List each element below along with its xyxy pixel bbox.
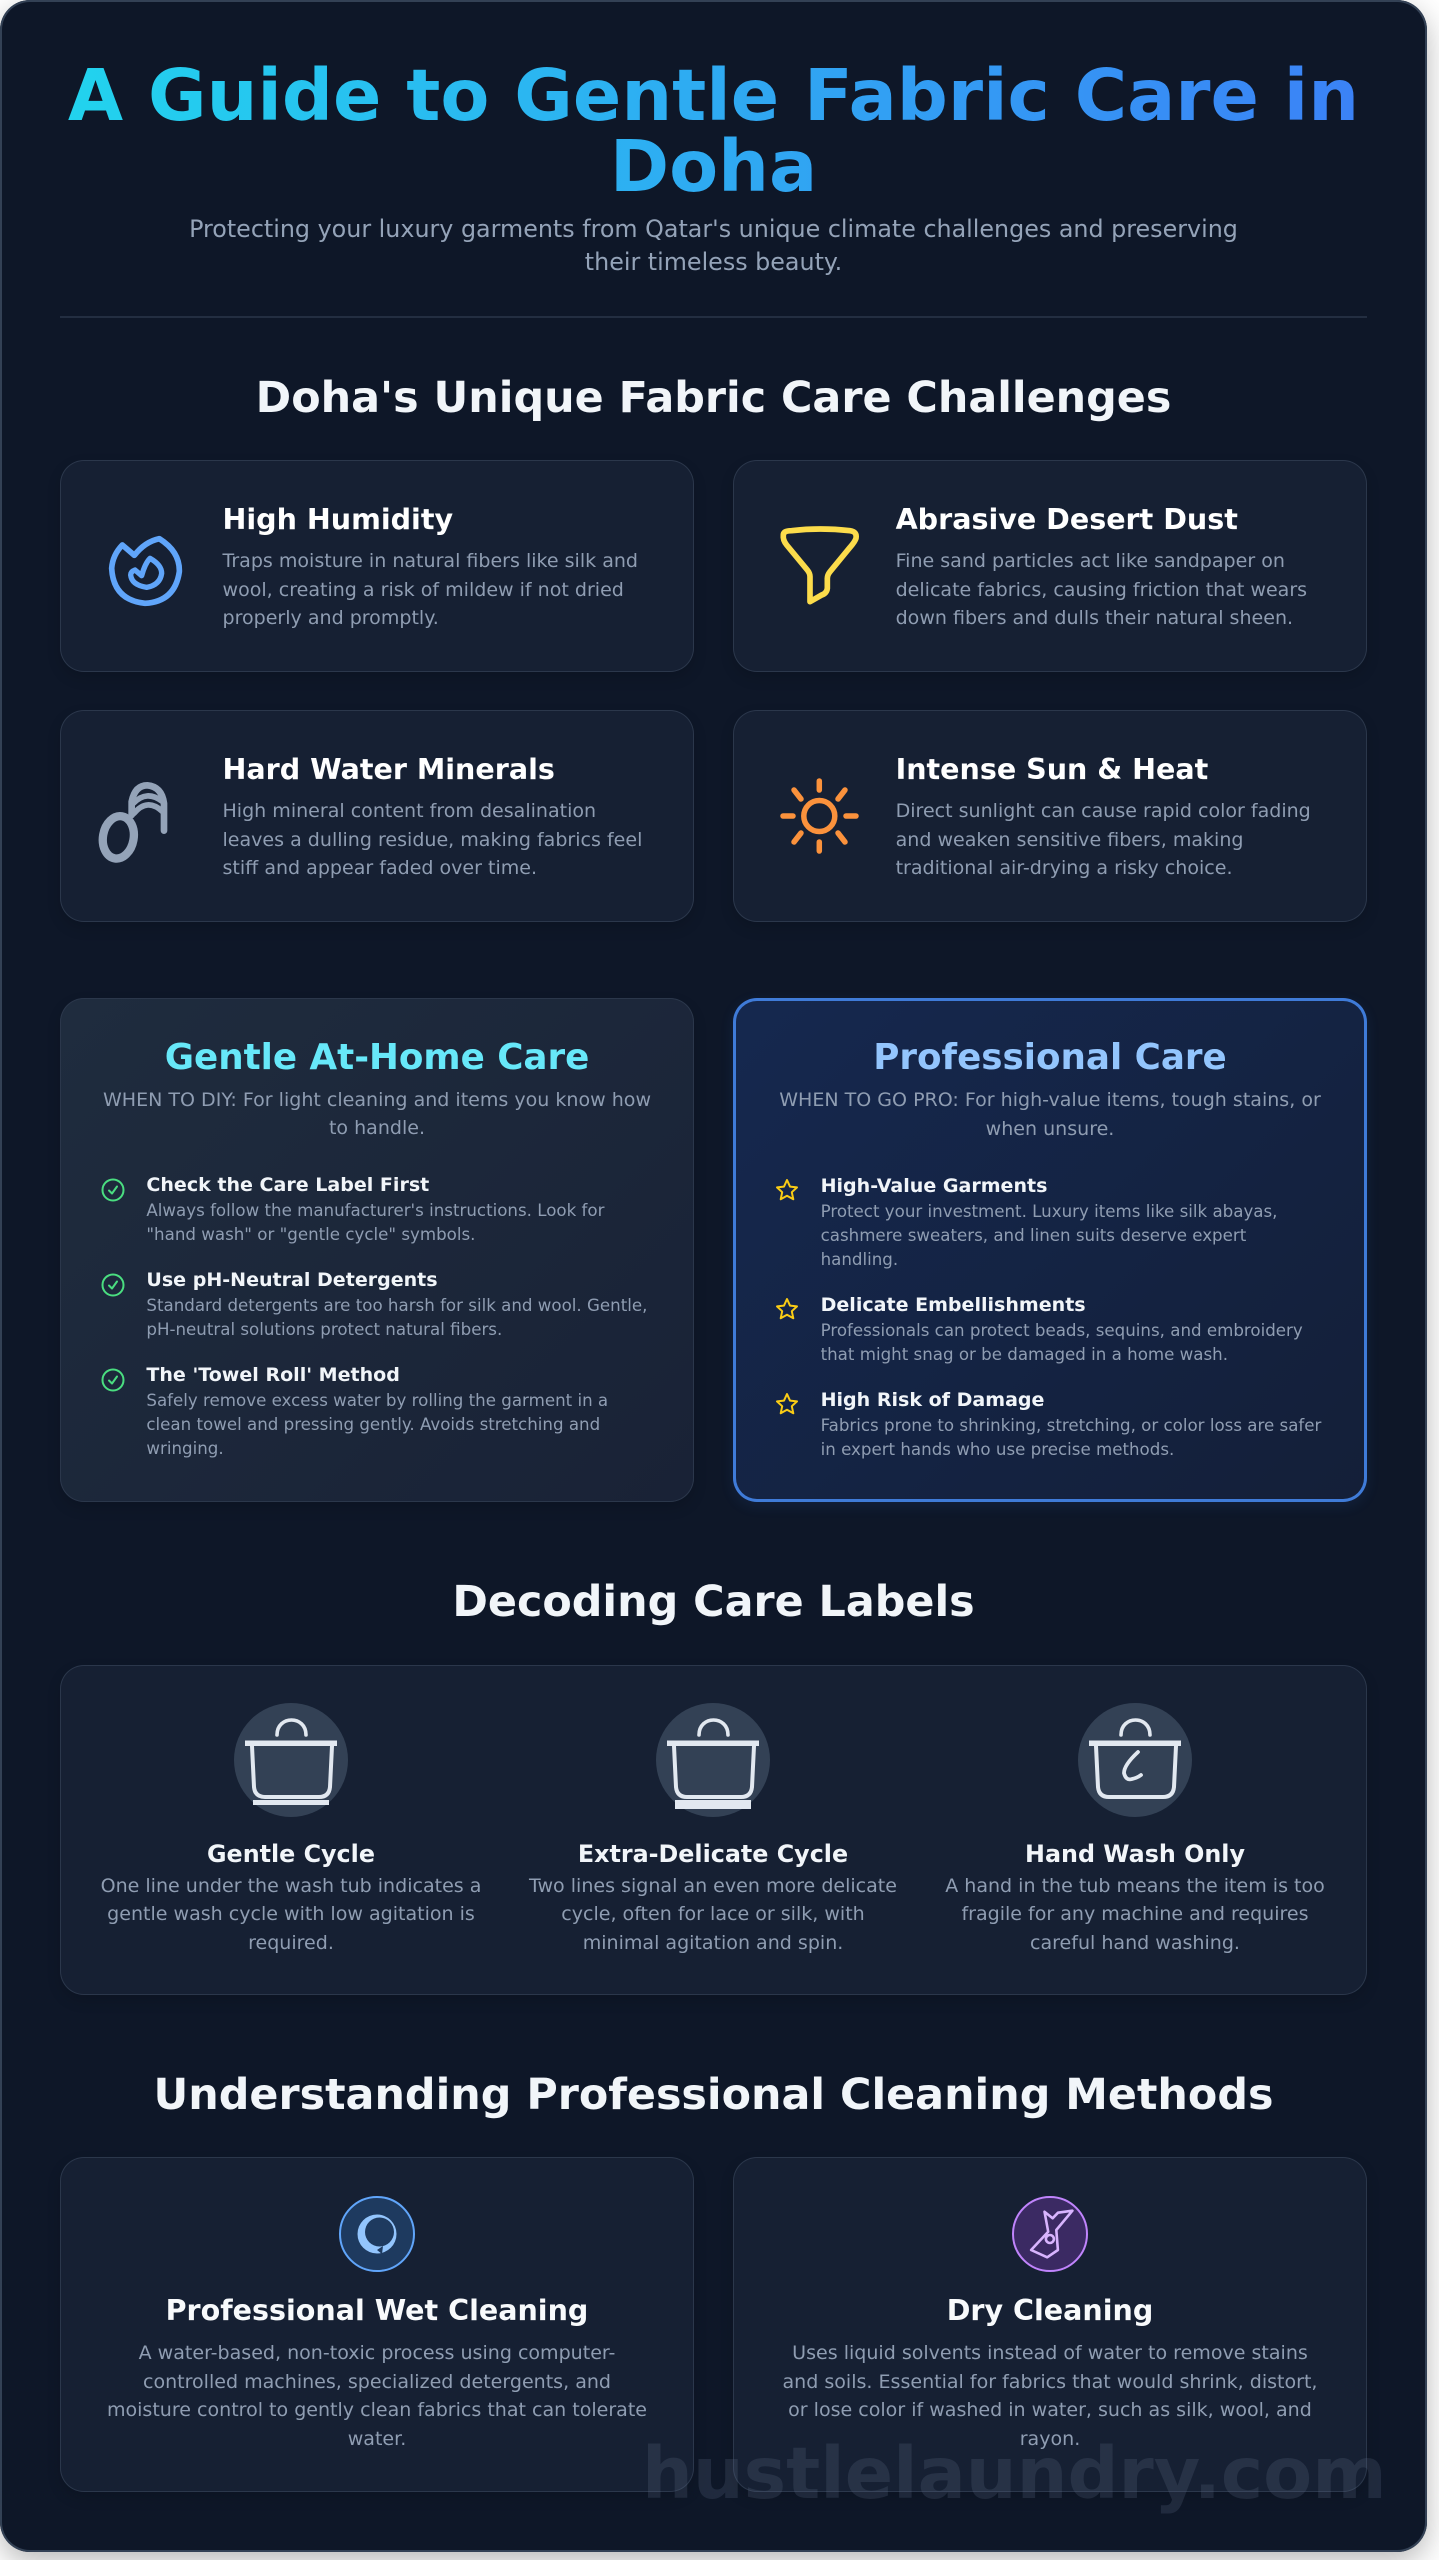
panel: gentle at-home care	[60, 998, 694, 1502]
subtitle: their timeless beauty.	[585, 248, 842, 276]
label text: careful hand washing.	[1030, 1932, 1240, 1954]
icon: funnel	[780, 526, 859, 604]
panel: desert dust	[733, 460, 1367, 672]
method text: and soils. Essential for fabrics that would shrink, distort,	[783, 2371, 1317, 2393]
panel: wet cleaning	[60, 2157, 694, 2492]
when to DIY text	[103, 1089, 651, 1139]
item text: Fabrics prone to shrinking, stretching, or color loss are safer	[821, 1416, 1321, 1435]
item text	[146, 1201, 604, 1244]
method text: water.	[348, 2428, 406, 2450]
panel: care labels	[60, 1665, 1367, 1995]
method text	[60, 2339, 694, 2453]
card text: delicate fabrics, causing friction that wears	[896, 579, 1307, 601]
watermark: hustlelaundry.com	[642, 2432, 1387, 2515]
item text: Safely remove excess water by rolling the garment in a	[146, 1391, 608, 1410]
label: extra-delicate cycle	[528, 1840, 897, 1954]
icon: wet cleaning circle	[339, 2196, 415, 2272]
item: towel roll	[102, 1364, 608, 1458]
panel: professional care	[733, 998, 1367, 1502]
subtitle	[189, 215, 1238, 276]
label: hand wash only	[945, 1840, 1325, 1954]
item title: Delicate Embellishments	[821, 1294, 1086, 1316]
icon: extra-delicate tub	[656, 1703, 770, 1817]
card text: leaves a dulling residue, making fabrics feel	[222, 829, 642, 851]
label text: Two lines signal an even more delicate	[529, 1874, 897, 1896]
icon: humidity swirl drop	[108, 536, 182, 606]
method text: Uses liquid solvents instead of water to remove stains	[792, 2342, 1308, 2364]
item text	[821, 1202, 1277, 1269]
card text: stiff and appear faded over time.	[222, 857, 537, 879]
subtitle: Protecting your luxury garments from Qatar's unique climate challenges and preserving	[189, 215, 1238, 243]
label text: One line under the wash tub indicates a	[101, 1874, 481, 1896]
label title: Extra-Delicate Cycle	[578, 1840, 848, 1868]
label title: Hand Wash Only	[1025, 1840, 1245, 1868]
item title: Use pH-Neutral Detergents	[146, 1269, 438, 1291]
card text: wool, creating a risk of mildew if not dried	[222, 579, 624, 601]
label: gentle cycle	[101, 1840, 481, 1954]
panel heading: Gentle At-Home Care	[165, 1036, 589, 1078]
icon: hand wash tub	[1078, 1703, 1192, 1817]
method text: or lose color if washed in water, such as silk, wool, and	[788, 2399, 1312, 2421]
icon: gentle cycle tub	[234, 1703, 348, 1817]
method text	[733, 2339, 1367, 2453]
card text: Direct sunlight can cause rapid color fading	[896, 800, 1311, 822]
item: risk of damage	[776, 1389, 1322, 1459]
title: Doha	[610, 125, 817, 208]
item text: Standard detergents are too harsh for silk and wool. Gentle,	[146, 1296, 647, 1315]
item text	[146, 1391, 608, 1458]
label text: cycle, often for lace or silk, with	[561, 1903, 865, 1925]
item text: wringing.	[146, 1439, 224, 1458]
panel: dry cleaning	[733, 2157, 1367, 2492]
when to go pro text: when unsure.	[986, 1118, 1114, 1140]
icon: star	[776, 1179, 798, 1200]
label text: minimal agitation and spin.	[583, 1932, 843, 1954]
item: high value	[776, 1175, 1277, 1269]
item text: handling.	[821, 1250, 898, 1269]
item text: Protect your investment. Luxury items like silk abayas,	[821, 1202, 1277, 1221]
item title: The 'Towel Roll' Method	[146, 1364, 400, 1386]
icon: dry cleaning circle	[1012, 2196, 1088, 2272]
item text: in expert hands who use precise methods.	[821, 1440, 1174, 1459]
label text: fragile for any machine and requires	[961, 1903, 1309, 1925]
method text: moisture control to gently clean fabrics that can tolerate	[107, 2399, 647, 2421]
card text: Traps moisture in natural fibers like silk and	[222, 550, 638, 572]
title: A Guide to Gentle Fabric Care in	[68, 54, 1359, 137]
icon: sun	[780, 778, 859, 854]
item text: cashmere sweaters, and linen suits deserve expert	[821, 1226, 1246, 1245]
item title: High Risk of Damage	[821, 1389, 1044, 1411]
method title: Dry Cleaning	[947, 2293, 1153, 2327]
method text: controlled machines, specialized detergents, and	[143, 2371, 611, 2393]
when to DIY text: to handle.	[329, 1117, 425, 1139]
heading: cleaning methods: Understanding Professional Cleaning Methods	[153, 2070, 1274, 2120]
icon: star	[776, 1298, 798, 1320]
card text	[896, 800, 1311, 879]
card title: Hard Water Minerals	[222, 752, 555, 786]
card title: Intense Sun & Heat	[896, 752, 1208, 786]
panel: high humidity	[60, 460, 694, 672]
card text: properly and promptly.	[222, 607, 439, 629]
item text: clean towel and pressing gently. Avoids stretching and	[146, 1415, 600, 1434]
label text	[101, 1874, 481, 1954]
icon: hard water rings	[98, 782, 168, 863]
icon: check	[102, 1274, 124, 1296]
card title: High Humidity	[222, 502, 453, 536]
item text: pH-neutral solutions protect natural fibers.	[146, 1320, 502, 1339]
heading: care labels: Decoding Care Labels	[452, 1577, 975, 1627]
card text: and weaken sensitive fibers, making	[896, 829, 1243, 851]
item text: "hand wash" or "gentle cycle" symbols.	[146, 1225, 475, 1244]
label text	[945, 1874, 1325, 1954]
item: embellishments	[776, 1294, 1303, 1364]
card text: High mineral content from desalination	[222, 800, 596, 822]
label title: Gentle Cycle	[207, 1840, 375, 1868]
icon: check	[102, 1368, 124, 1392]
label text: A hand in the tub means the item is too	[945, 1874, 1325, 1896]
panel heading: Professional Care	[873, 1037, 1227, 1078]
method text: A water-based, non-toxic process using computer-	[139, 2342, 615, 2364]
icon: star	[776, 1393, 798, 1414]
icon: check	[102, 1178, 124, 1202]
item text: Professionals can protect beads, sequins, and embroidery	[821, 1321, 1303, 1340]
item title: Check the Care Label First	[146, 1174, 429, 1196]
method title: Professional Wet Cleaning	[166, 2293, 588, 2327]
label text: gentle wash cycle with low agitation is	[107, 1903, 475, 1925]
item text	[821, 1416, 1322, 1459]
when to go pro text	[779, 1089, 1321, 1140]
label text: required.	[248, 1932, 334, 1954]
label text	[528, 1874, 897, 1954]
item title: High-Value Garments	[821, 1175, 1047, 1197]
item: care label	[102, 1174, 604, 1244]
item: detergents	[102, 1269, 647, 1339]
card text	[222, 800, 642, 879]
when to DIY text: WHEN TO DIY: For light cleaning and items you know how	[103, 1089, 651, 1111]
when to go pro text: WHEN TO GO PRO: For high-value items, tough stains, or	[779, 1089, 1321, 1111]
card title: Abrasive Desert Dust	[896, 502, 1238, 536]
panel: sun and heat	[733, 710, 1367, 922]
item text: Always follow the manufacturer's instructions. Look for	[146, 1201, 604, 1220]
card text: traditional air-drying a risky choice.	[896, 857, 1233, 879]
title	[68, 54, 1359, 208]
card text: Fine sand particles act like sandpaper on	[896, 550, 1285, 572]
item text: that might snag or be damaged in a home wash.	[821, 1345, 1228, 1364]
card text	[896, 550, 1307, 629]
card text: down fibers and dulls their natural sheen.	[896, 607, 1293, 629]
item text	[821, 1321, 1303, 1364]
heading: challenges: Doha's Unique Fabric Care Challenges	[256, 373, 1171, 423]
panel: hard water	[60, 710, 694, 922]
method text: rayon.	[1020, 2428, 1080, 2450]
item text	[146, 1296, 647, 1339]
card text	[222, 550, 638, 629]
